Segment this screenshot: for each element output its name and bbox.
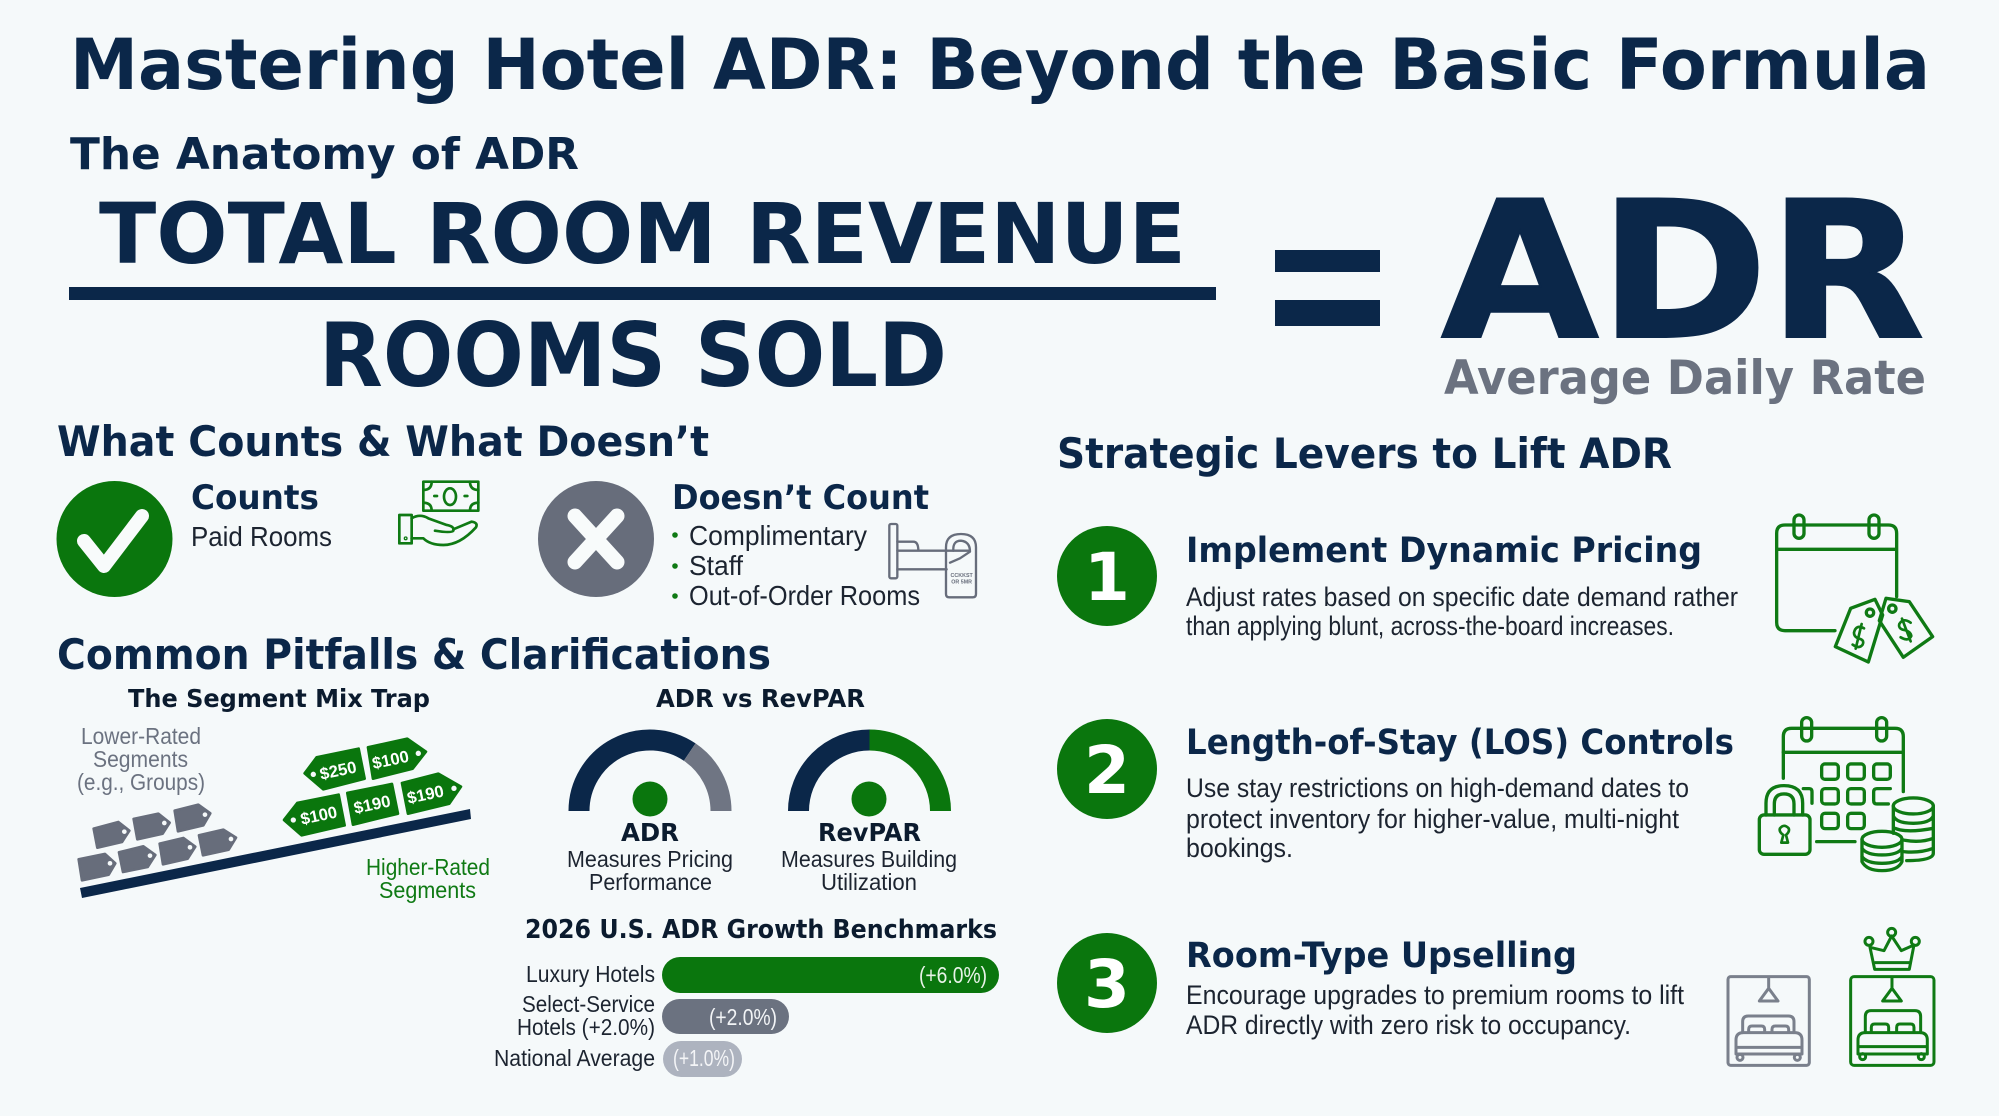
number badge 3: 3 — [1084, 946, 1130, 1023]
bar chart: 2026 growth benchmarks — [494, 915, 999, 1077]
ADR gauge caption: Measures Pricing — [567, 846, 733, 872]
lever 2: length-of-stay controls — [1057, 718, 1933, 871]
panel: strategic levers — [1057, 429, 1934, 1065]
icon: premium room with crown — [1851, 928, 1934, 1065]
gauge: RevPAR — [798, 740, 940, 816]
green high-rated tags: $190 — [352, 791, 392, 818]
RevPAR gauge caption: RevPAR — [818, 818, 921, 847]
ADR result: ADR — [1441, 161, 1925, 382]
counts label: Counts — [191, 478, 319, 518]
green high-rated tags: $100 — [299, 802, 339, 829]
heading: what counts: What Counts & What Doesn’t — [57, 417, 709, 466]
panel: what counts and what doesn't — [56, 417, 976, 611]
icon: out of order bed with door hanger — [889, 524, 976, 597]
lever 1 text: than applying blunt, across-the-board increases. — [1186, 611, 1674, 641]
lever 1 text — [1186, 582, 1738, 641]
lower-rated label: (e.g., Groups) — [77, 769, 205, 795]
heading: strategic levers: Strategic Levers to Lift ADR — [1057, 429, 1672, 478]
lower-rated label — [77, 723, 205, 795]
formula numerator: TOTAL ROOM REVENUE — [99, 185, 1186, 283]
icon: out of order bed with door hanger: OR 5MR — [951, 579, 972, 585]
subheading: segment mix trap: The Segment Mix Trap — [128, 684, 430, 713]
ADR subtitle: Average Daily Rate — [1444, 351, 1926, 406]
green high-rated tags: $250 — [318, 757, 358, 784]
ADR gauge caption — [567, 818, 733, 895]
bar: national average: (+1.0%) — [673, 1045, 735, 1071]
green high-rated tags: $190 — [405, 781, 446, 808]
lever 3 text — [1186, 980, 1684, 1040]
bar: luxury: Luxury Hotels — [526, 961, 655, 987]
subheading: ADR vs RevPAR: ADR vs RevPAR — [656, 684, 865, 713]
number badge 1 — [1057, 526, 1157, 626]
icon: out of order bed with door hanger: CCKKST — [951, 573, 974, 579]
chart title: 2026 U.S. ADR Growth Benchmarks — [525, 915, 997, 945]
panel: anatomy of ADR formula — [69, 129, 1926, 407]
ADR gauge caption: ADR — [621, 818, 679, 847]
bar: select-service: Select-Service — [522, 991, 655, 1017]
formula denominator: ROOMS SOLD — [319, 304, 947, 407]
RevPAR gauge caption — [781, 818, 957, 895]
heading: anatomy: The Anatomy of ADR — [70, 129, 579, 180]
lower-rated label: Lower-Rated — [81, 723, 201, 749]
number badge 3 — [1057, 933, 1157, 1033]
lever 3 text: ADR directly with zero risk to occupancy. — [1186, 1010, 1631, 1040]
lever 2 heading: Length-of-Stay (LOS) Controls — [1186, 723, 1734, 763]
exclusions list — [672, 520, 920, 611]
lever 3 text: Encourage upgrades to premium rooms to lift — [1186, 980, 1684, 1010]
bar: select-service: Hotels (+2.0%) — [517, 1014, 655, 1040]
panel: common pitfalls — [57, 630, 999, 1077]
bar: luxury: (+6.0%) — [919, 962, 987, 988]
icon: calendar with price tags — [1777, 515, 1933, 662]
bar: national average — [494, 1041, 742, 1077]
icon: check circle — [56, 481, 172, 597]
doesn't count label: Doesn’t Count — [672, 478, 929, 518]
exclusions list: Staff — [689, 550, 743, 581]
lever 2 text — [1186, 773, 1689, 863]
bar: luxury — [526, 957, 999, 993]
RevPAR gauge caption: Measures Building — [781, 846, 957, 872]
higher-rated label: Higher-Rated — [366, 854, 490, 880]
exclusions list: Out-of-Order Rooms — [689, 580, 920, 611]
green high-rated tags — [284, 739, 461, 835]
gray low-rated tags — [79, 805, 236, 880]
bar: national average: National Average — [494, 1045, 655, 1071]
lever 2 text: bookings. — [1186, 833, 1293, 863]
exclusions list: Complimentary — [689, 520, 867, 551]
lever 2 text: protect inventory for higher-value, multi-night — [1186, 804, 1679, 834]
number badge 1: 1 — [1084, 539, 1130, 616]
gauge: ADR — [579, 740, 721, 816]
green high-rated tags: $100 — [370, 747, 411, 773]
icon: hand with money — [399, 482, 478, 545]
ramp — [80, 809, 471, 898]
RevPAR gauge caption: Utilization — [821, 869, 917, 895]
higher-rated label: Segments — [379, 877, 476, 903]
equals sign — [1275, 250, 1380, 326]
higher-rated label — [366, 854, 490, 903]
bar: select-service — [517, 991, 789, 1040]
number badge 2 — [1057, 719, 1157, 819]
lever 2 text: Use stay restrictions on high-demand dates to — [1186, 773, 1689, 803]
lever 1 text: Adjust rates based on specific date demand rather — [1186, 582, 1738, 612]
icon: x circle — [538, 481, 654, 597]
icon: calendar with lock and coins — [1759, 718, 1933, 871]
lever 3: room-type upselling — [1057, 928, 1934, 1065]
lever 1: dynamic pricing — [1057, 515, 1933, 662]
title: Mastering Hotel ADR: Beyond the Basic Formula — [70, 24, 1930, 106]
lever 1 heading: Implement Dynamic Pricing — [1186, 531, 1702, 571]
icon: standard room — [1728, 977, 1809, 1065]
ADR gauge caption: Performance — [589, 869, 712, 895]
fraction bar — [69, 287, 1216, 300]
lever 3 heading: Room-Type Upselling — [1186, 936, 1577, 976]
lower-rated label: Segments — [93, 746, 188, 772]
heading: pitfalls: Common Pitfalls & Clarifications — [57, 630, 771, 679]
paid rooms text: Paid Rooms — [191, 521, 332, 552]
bar: select-service: (+2.0%) — [709, 1004, 777, 1030]
number badge 2: 2 — [1084, 732, 1130, 809]
